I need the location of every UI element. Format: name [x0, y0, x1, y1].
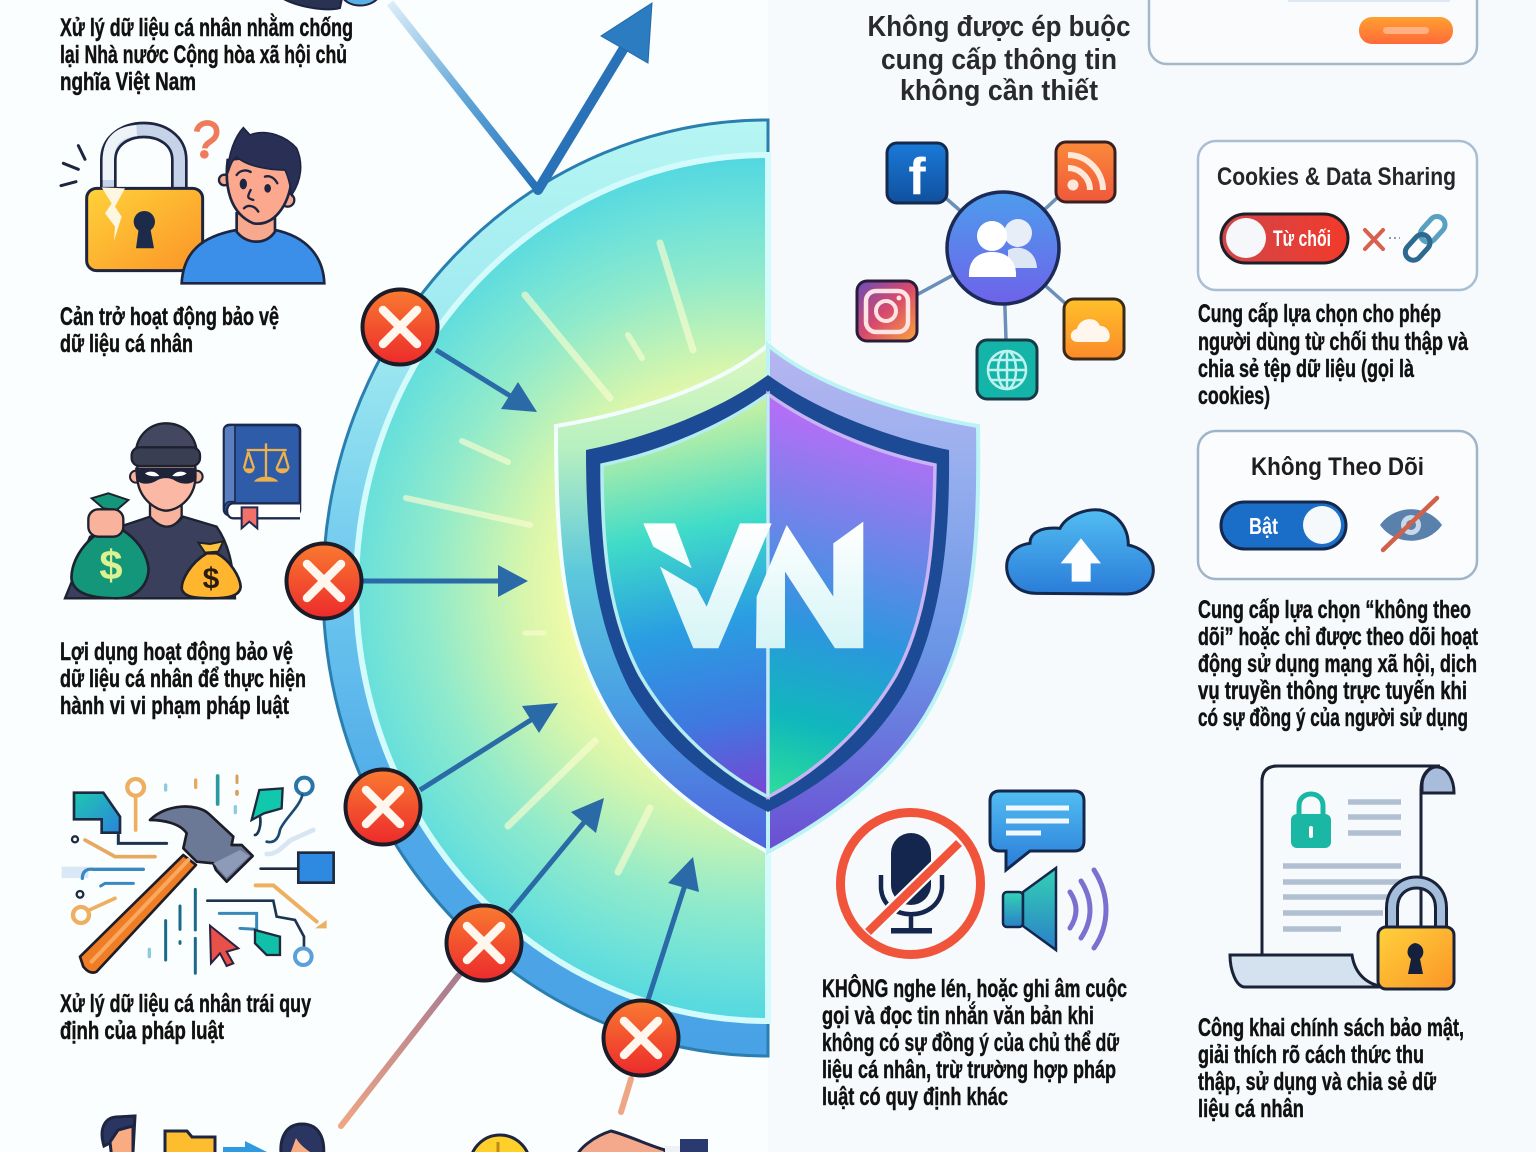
icon: Facebook: f [908, 148, 926, 206]
text: violation 1 [60, 12, 353, 96]
text: VN logo letters [643, 522, 863, 648]
arrow: faded line below marker 5 [621, 1079, 631, 1112]
text: no eavesdropping [822, 973, 1127, 1111]
text: cookies description [1198, 300, 1468, 410]
icon: orange cloud [1064, 299, 1124, 359]
text: violation 3: hành vi vi phạm pháp luật [60, 692, 290, 720]
icon: Instagram [857, 281, 917, 341]
text: publish privacy policy: giải thích rõ cách thức thu [1198, 1041, 1424, 1069]
text: cookies description: chia sẻ tệp dữ liệu (gọi là [1198, 355, 1414, 383]
icon: hammer [80, 807, 253, 973]
icon: shield with VN logo [556, 345, 978, 852]
arrow: marker 3 to shield [420, 703, 558, 790]
arrow: marker 2 to shield [362, 565, 528, 597]
marker: red X 2 [286, 544, 362, 618]
text: violation 3 [60, 638, 306, 720]
text: violation 1: Xử lý dữ liệu cá nhân nhằm chống [60, 12, 353, 42]
icon: people hub [947, 192, 1059, 304]
icon: cropped figure at top [282, 0, 378, 9]
text: violation 2: dữ liệu cá nhân [60, 330, 193, 358]
icon: privacy policy document with lock [1230, 766, 1454, 989]
arrow: faded line below marker 4 [341, 975, 459, 1126]
icon: thief with money bags and law book: $ [99, 541, 123, 588]
panel: cropped card at top right [1149, 0, 1477, 64]
heading: Cookies and Data Sharing: Cookies & Data Sharing [1217, 163, 1456, 191]
icon: thief with money bags and law book [65, 423, 300, 598]
marker: red X 3 [346, 770, 420, 844]
text: cookies description: Cung cấp lựa chọn cho phép [1198, 300, 1441, 328]
icon: blocked chain link [1365, 213, 1448, 264]
icon: law book [224, 425, 300, 528]
arrow: marker 5 to shield [648, 857, 699, 1000]
text: no eavesdropping: luật có quy định khác [822, 1083, 1008, 1111]
text: no eavesdropping: gọi và đọc tin nhắn văn bản khi [822, 1000, 1094, 1030]
heading: no forced data collection: Không được ép buộc [868, 11, 1130, 43]
marker: red X 5 [604, 1000, 678, 1076]
arrow: marker 1 to shield [436, 350, 537, 412]
icon: no microphone [840, 812, 980, 954]
icon: broken lock and worried man [61, 123, 324, 283]
text: no eavesdropping: liệu cá nhân, trừ trường hợp pháp [822, 1056, 1116, 1084]
text: violation 4: Xử lý dữ liệu cá nhân trái quy [60, 990, 311, 1018]
icon: globe [977, 340, 1037, 399]
marker: red X 4 [446, 906, 522, 980]
arrow: top faded line and upward arrow [390, 3, 652, 190]
icon: crossed eye [1380, 498, 1442, 550]
text: no eavesdropping: không có sự đồng ý của chủ thể dữ [822, 1029, 1120, 1057]
text: publish privacy policy: thập, sử dụng và chia sẻ dữ [1198, 1068, 1437, 1096]
text: cookies description: cookies) [1198, 382, 1270, 410]
text: violation 2: Cản trở hoạt động bảo vệ [60, 303, 279, 331]
icon: speaker with sound waves [1003, 868, 1106, 950]
text: violation 3: Lợi dụng hoạt động bảo vệ [60, 638, 293, 666]
text: violation 4 [60, 990, 311, 1045]
icon: thief with money bags and law book: $ [203, 562, 220, 595]
toggle: on [1221, 502, 1346, 549]
icon: cloud upload [1007, 510, 1153, 594]
text: violation 1: nghĩa Việt Nam [60, 68, 196, 96]
text: publish privacy policy: liệu cá nhân [1198, 1095, 1304, 1123]
toggle: on: Bật [1249, 513, 1278, 539]
marker: red X 1 [362, 290, 438, 364]
icon: Facebook [887, 143, 947, 206]
text: violation 2 [60, 303, 279, 358]
icon: coin and hand (cropped) [470, 1131, 708, 1152]
icon: social network hub [857, 142, 1124, 399]
heading: no forced data collection: không cần thiết [900, 75, 1098, 107]
icon: people sharing a folder (cropped) [102, 1116, 324, 1152]
heading: Do Not Track: Không Theo Dõi [1251, 453, 1424, 481]
toggle: refuse [1221, 214, 1348, 263]
panel: shield half-circle backdrop [323, 120, 768, 1056]
text: violation 4: định của pháp luật [60, 1017, 224, 1045]
arrow: marker 4 to shield [510, 798, 604, 912]
icon: hammer breaking circuit lines [62, 776, 334, 973]
heading: no forced data collection [868, 11, 1130, 107]
toggle: refuse: Từ chối [1273, 226, 1331, 251]
heading: no forced data collection: cung cấp thông tin [881, 44, 1117, 76]
text: violation 1: lại Nhà nước Cộng hòa xã hội chủ [60, 41, 347, 69]
icon: speech bubble [990, 791, 1084, 870]
text: violation 3: dữ liệu cá nhân để thực hiện [60, 665, 306, 693]
panel: Do Not Track [1198, 431, 1477, 579]
text: no eavesdropping: KHÔNG nghe lén, hoặc ghi âm cuộc [822, 973, 1127, 1003]
text: publish privacy policy [1198, 1014, 1464, 1123]
text: do not track description [1198, 596, 1478, 732]
icon: RSS feed [1056, 142, 1115, 202]
panel: Cookies and Data Sharing [1198, 141, 1477, 290]
